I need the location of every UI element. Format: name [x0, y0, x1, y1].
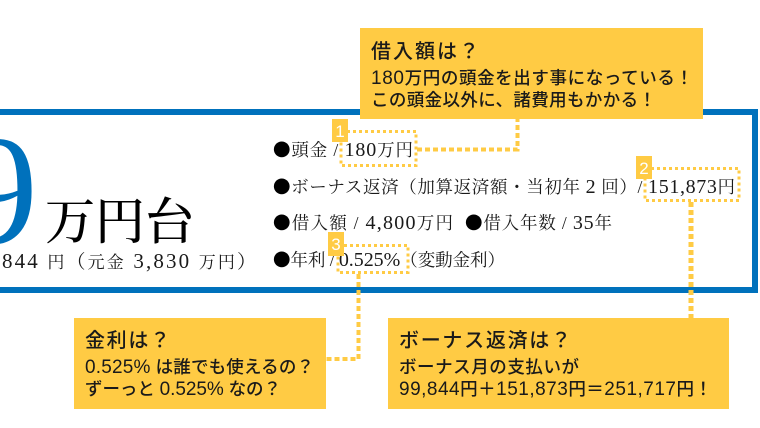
- callout: interest rate: 0.525% は誰でも使えるの？: [85, 357, 314, 378]
- highlight box 1: [341, 132, 416, 166]
- callout: interest rate: ずーっと 0.525% なの？: [85, 379, 281, 400]
- blue frame panel: [0, 112, 755, 290]
- loan details list: ●借入額 / 4,800万円: [273, 210, 453, 235]
- loan details list: ●頭金 / 180万円: [273, 137, 413, 162]
- loan details list: [273, 137, 735, 272]
- loan details list: ●年利 / 0.525%（変動金利）: [273, 247, 505, 272]
- badge 1: 1: [335, 122, 345, 141]
- connector 2: [688, 202, 694, 318]
- callout: loan amount: この頭金以外に、諸費用もかかる！: [371, 90, 656, 110]
- callout: loan amount: [360, 28, 703, 119]
- badge 1: [332, 119, 348, 142]
- loan details list: ●借入年数 / 35年: [465, 210, 612, 235]
- connector 1: [417, 119, 518, 150]
- callout: bonus repayment: 99,844円＋151,873円＝251,717円！: [399, 379, 712, 400]
- callout: bonus repayment: ボーナス月の支払いが: [399, 357, 580, 377]
- callout: bonus repayment: ボーナス返済は？: [399, 329, 571, 352]
- badge 2: 2: [639, 159, 649, 178]
- badge 3: [328, 232, 344, 256]
- callout: bonus repayment: [388, 318, 729, 409]
- callout: interest rate: [74, 318, 326, 409]
- price headline: 万円台: [45, 194, 195, 250]
- price headline: 844 円（元金 3,830 万円）: [2, 249, 256, 273]
- callout: loan amount: 借入額は？: [371, 40, 479, 63]
- connector 3: [326, 274, 358, 359]
- callout: loan amount: 180万円の頭金を出す事になっている！: [371, 68, 693, 89]
- highlight box 3: [338, 246, 408, 272]
- badge 3: 3: [331, 235, 341, 254]
- loan details list: ●ボーナス返済（加算返済額・当初年 2 回）/ 151,873円: [273, 174, 735, 199]
- badge 2: [636, 156, 652, 179]
- highlight box 2: [645, 168, 739, 200]
- price headline: [0, 103, 256, 277]
- callout: interest rate: 金利は？: [85, 329, 170, 352]
